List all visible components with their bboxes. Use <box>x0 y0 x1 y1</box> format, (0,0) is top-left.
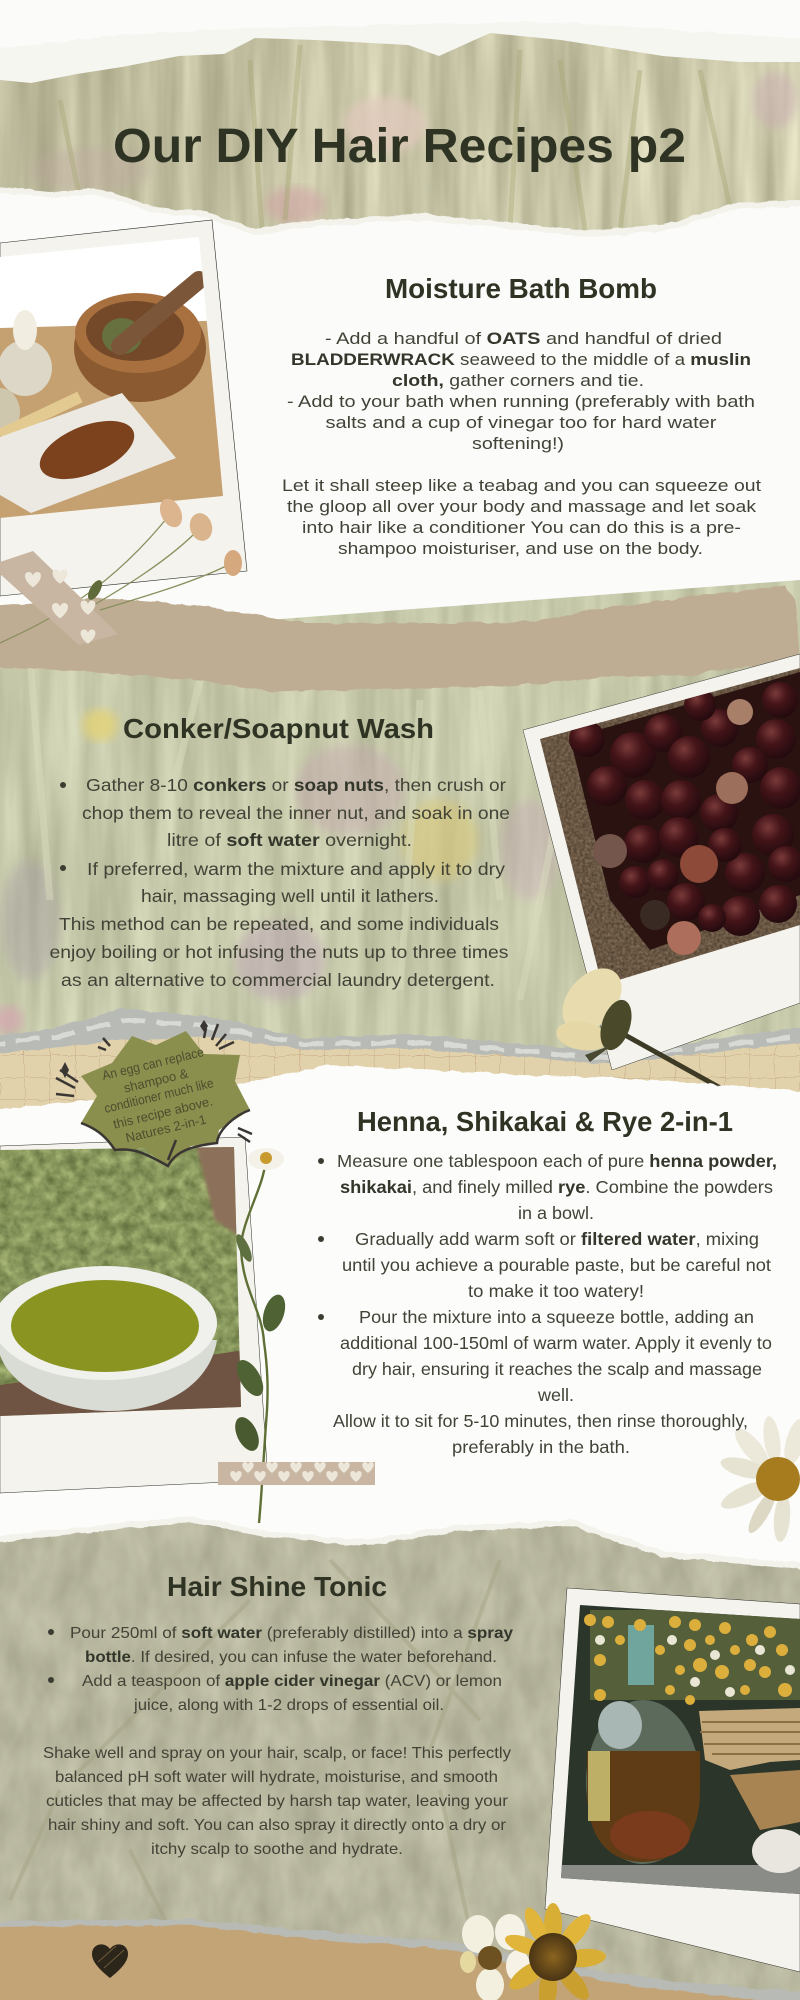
callout: starburst egg tip: conditioner much like <box>103 1075 215 1116</box>
icon: dried flowers <box>0 495 242 643</box>
text block: moisture bath bomb method: shampoo moisturiser, and use on the body. <box>338 539 703 558</box>
text block: henna method: Gradually add warm soft or filtered water , mixing <box>355 1229 759 1249</box>
text block: conker wash method <box>50 775 510 990</box>
text block: moisture bath bomb method: softening!) <box>472 434 564 453</box>
text block: conker wash method: litre of soft water overnight. <box>167 830 412 850</box>
torn paper edge of tonic section <box>0 1519 800 1568</box>
torn paper edge of title band <box>0 188 800 234</box>
text block: moisture bath bomb method: BLADDERWRACK seaweed to the middle of a muslin <box>291 350 751 369</box>
text block: hair shine tonic method: hair shiny and soft. You can also spray it directly onto a dry or <box>48 1817 507 1834</box>
text block: conker wash method: Gather 8-10 conkers or soap nuts , then crush or <box>86 775 506 795</box>
panel: meadow section behind conker recipe <box>0 580 800 1080</box>
text block: henna method <box>318 1151 777 1457</box>
text block: moisture bath bomb method: - Add to your bath when running (preferably with bath <box>287 392 755 411</box>
text block: henna method: Allow it to sit for 5-10 minutes, then rinse thoroughly, <box>333 1411 748 1431</box>
panel: kraft torn paper strip <box>0 585 800 691</box>
panel: polaroid photo of conkers <box>523 654 800 1070</box>
text block: moisture bath bomb method <box>282 329 761 558</box>
text block: moisture bath bomb method: into hair like a conditioner You can do this is a pre- <box>302 518 741 537</box>
text block: henna method: well. <box>537 1385 574 1405</box>
text block: conker wash method: If preferred, warm the mixture and apply it to dry <box>87 859 505 879</box>
text block: hair shine tonic method: itchy scalp to soothe and hydrate. <box>151 1841 403 1858</box>
callout: starburst egg tip: Natures 2-in-1 <box>124 1112 208 1145</box>
text block: henna method: dry hair, ensuring it reaches the scalp and massage <box>352 1359 762 1379</box>
panel: polaroid photo of mortar and herbs <box>0 220 247 596</box>
icon: washi tape strip <box>218 1462 375 1485</box>
panel: polaroid photo of henna powder <box>0 1137 268 1493</box>
text block: conker wash method: This method can be repeated, and some individuals <box>59 914 499 934</box>
text block: henna method: in a bowl. <box>518 1203 594 1223</box>
icon: washi tape with hearts <box>0 551 118 645</box>
callout: starburst egg tip: this recipe above. <box>112 1093 214 1132</box>
text block: conker wash method: hair, massaging well until it lathers. <box>141 886 439 906</box>
panel: meadow section behind hair shine tonic <box>0 1510 800 2000</box>
text block: conker wash method: chop them to reveal the inner nut, and soak in one <box>82 803 510 823</box>
heading: Moisture Bath Bomb: Moisture Bath Bomb <box>385 273 657 304</box>
text block: henna method: until you achieve a pourable paste, but be careful not <box>342 1255 771 1275</box>
callout: starburst egg tip: shampoo & <box>122 1065 190 1095</box>
text block: hair shine tonic method <box>43 1625 513 1858</box>
text block: conker wash method: as an alternative to commercial laundry detergent. <box>61 970 495 990</box>
heading: Conker/Soapnut Wash: Conker/Soapnut Wash <box>123 713 434 744</box>
icon: white pressed flower <box>460 1914 530 2000</box>
icon: climbing plant stem <box>230 1148 289 1523</box>
callout: starburst egg tip <box>56 1020 252 1166</box>
text block: moisture bath bomb method: salts and a cup of vinegar too for hard water <box>326 413 717 432</box>
heading: Henna, Shikakai and Rye 2-in-1: Henna, Shikakai & Rye 2-in-1 <box>357 1106 733 1137</box>
text block: henna method: Measure one tablespoon each of pure henna powder, <box>337 1151 777 1171</box>
text block: hair shine tonic method: Add a teaspoon of apple cider vinegar (ACV) or lemon <box>82 1673 502 1690</box>
text block: henna method: additional 100-150ml of warm water. Apply it evenly to <box>340 1333 772 1353</box>
text block: hair shine tonic method: juice, along with 1-2 drops of essential oil. <box>133 1697 444 1714</box>
callout: starburst egg tip: An egg can replace <box>101 1044 205 1083</box>
panel: bottom kraft torn paper <box>0 1919 800 2000</box>
title: Our DIY Hair Recipes p2 <box>113 120 686 173</box>
panel: title meadow band <box>0 33 800 231</box>
panel: white paper behind henna recipe <box>0 1065 800 1570</box>
icon: yellow pressed flower <box>502 1903 607 2000</box>
text block: henna method: shikakai, and finely milled rye. Combine the powders <box>340 1177 773 1197</box>
text block: henna method: preferably in the bath. <box>452 1437 630 1457</box>
heading: Hair Shine Tonic: Hair Shine Tonic <box>167 1571 387 1602</box>
text block: henna method: Pour the mixture into a squeeze bottle, adding an <box>359 1307 754 1327</box>
text block: moisture bath bomb method: - Add a handful of OATS and handful of dried <box>325 329 722 348</box>
panel: grey torn and grid paper divider <box>0 1009 800 1140</box>
text block: hair shine tonic method: Shake well and spray on your hair, scalp, or face! This perfectly <box>43 1745 511 1762</box>
panel: polaroid photo of chamomile bottle <box>545 1588 800 1972</box>
text block: hair shine tonic method: Pour 250ml of soft water (preferably distilled) into a spray <box>70 1625 513 1642</box>
text block: hair shine tonic method: bottle. If desired, you can infuse the water beforehand. <box>85 1649 497 1666</box>
text block: hair shine tonic method: balanced pH soft water will hydrate, moisturise, and smooth <box>55 1769 498 1786</box>
text block: moisture bath bomb method: the gloop all over your body and massage and let soak <box>287 497 757 516</box>
text block: moisture bath bomb method: cloth, gather corners and tie. <box>392 371 644 390</box>
icon: pressed yellow flower <box>550 957 724 1090</box>
text block: conker wash method: enjoy boiling or hot infusing the nuts up to three times <box>50 942 509 962</box>
icon: heart <box>92 1944 128 1978</box>
text block: moisture bath bomb method: Let it shall steep like a teabag and you can squeeze out <box>282 476 761 495</box>
text block: henna method: to make it too watery! <box>468 1281 644 1301</box>
text block: hair shine tonic method: cuticles that may be affected by harsh tap water, leaving your <box>46 1793 509 1810</box>
icon: daisy <box>718 1415 800 1543</box>
